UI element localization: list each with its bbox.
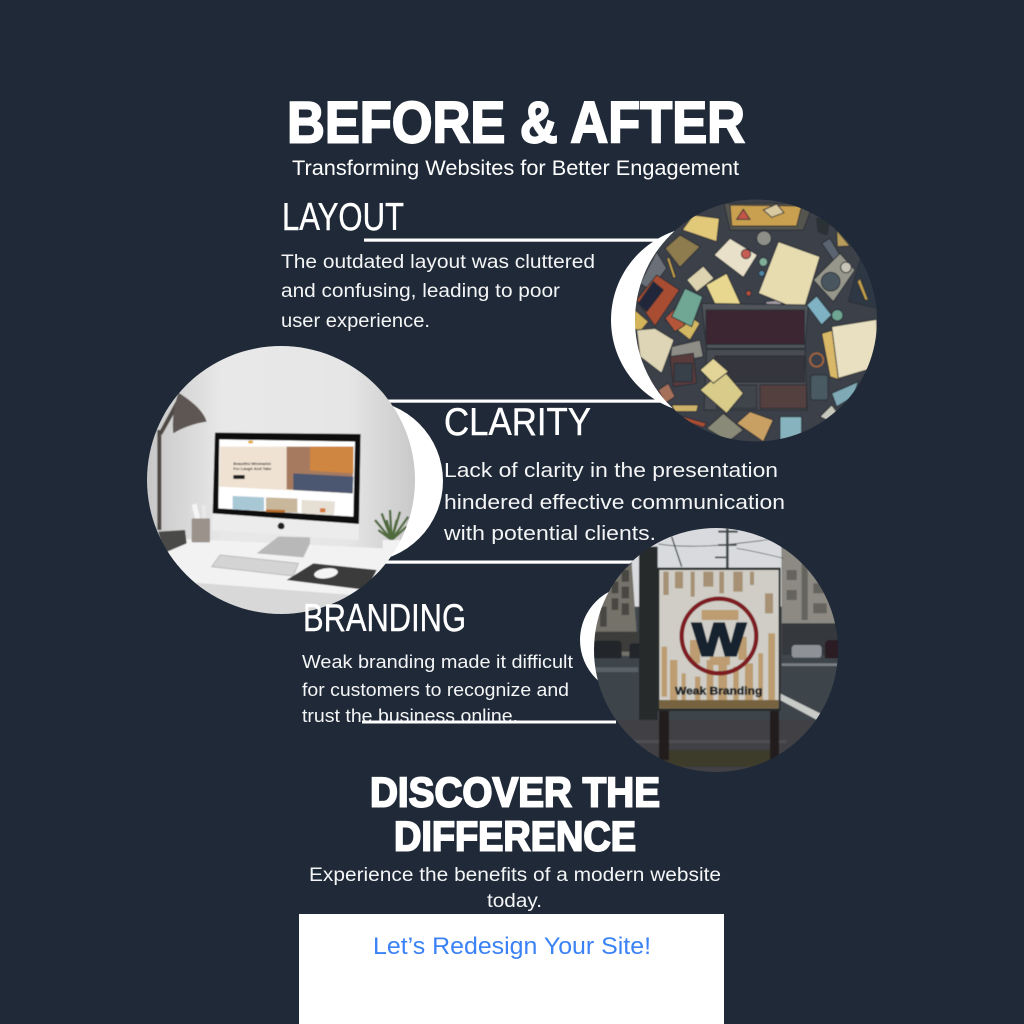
title: BEFORE & AFTER	[287, 90, 745, 156]
text: closing line	[309, 865, 721, 912]
text: closing line: today.	[487, 891, 542, 912]
text: clarity description: hindered effective communication	[444, 491, 785, 514]
text: branding description: Weak branding made it difficult	[302, 652, 573, 672]
text: layout description	[281, 252, 595, 332]
heading: discover the difference	[370, 768, 660, 860]
white crescent: branding	[580, 586, 689, 694]
connector lines: layout	[364, 238, 674, 403]
image: clean desk with monitor: Beautiful Minimalist	[233, 461, 272, 466]
text: branding description: trust the business online.	[302, 706, 518, 726]
heading: branding: BRANDING	[303, 597, 466, 640]
white crescent: clarity	[281, 400, 443, 562]
text: branding description	[302, 652, 573, 726]
text: closing line: Experience the benefits of a modern website	[309, 865, 721, 886]
text: layout description: user experience.	[281, 311, 430, 332]
subtitle: Transforming Websites for Better Engagement	[292, 157, 739, 180]
text: clarity description: with potential clients.	[443, 522, 656, 545]
heading: clarity: CLARITY	[444, 401, 591, 444]
heading: discover the difference: DISCOVER THE	[370, 768, 660, 816]
image: rusty weak branding sign	[594, 528, 838, 772]
button: call to action: Let’s Redesign Your Site!	[373, 933, 651, 960]
panel: clarity	[140, 340, 785, 620]
image: cluttered desk with laptop	[630, 197, 883, 443]
panel: layout	[281, 196, 883, 443]
connector line: clarity	[385, 560, 647, 564]
text: clarity description	[443, 459, 785, 545]
image: rusty weak branding sign: W	[692, 613, 746, 665]
image: clean desk with monitor	[140, 340, 417, 620]
image: rusty weak branding sign: Weak Branding	[675, 685, 762, 697]
heading: discover the difference: DIFFERENCE	[394, 812, 636, 860]
text: layout description: The outdated layout was cluttered	[281, 252, 595, 273]
text: branding description: for customers to recognize and	[302, 680, 569, 700]
text: layout description: and confusing, leading to poor	[281, 281, 561, 302]
white crescent: layout	[611, 226, 799, 414]
text: clarity description: Lack of clarity in the presentation	[444, 459, 778, 482]
button: call to action	[299, 914, 724, 1024]
heading: layout: LAYOUT	[282, 196, 404, 239]
panel: branding	[302, 520, 850, 780]
image: clean desk with monitor: For Laugh And Take	[233, 466, 272, 471]
connector line: branding	[362, 720, 616, 724]
